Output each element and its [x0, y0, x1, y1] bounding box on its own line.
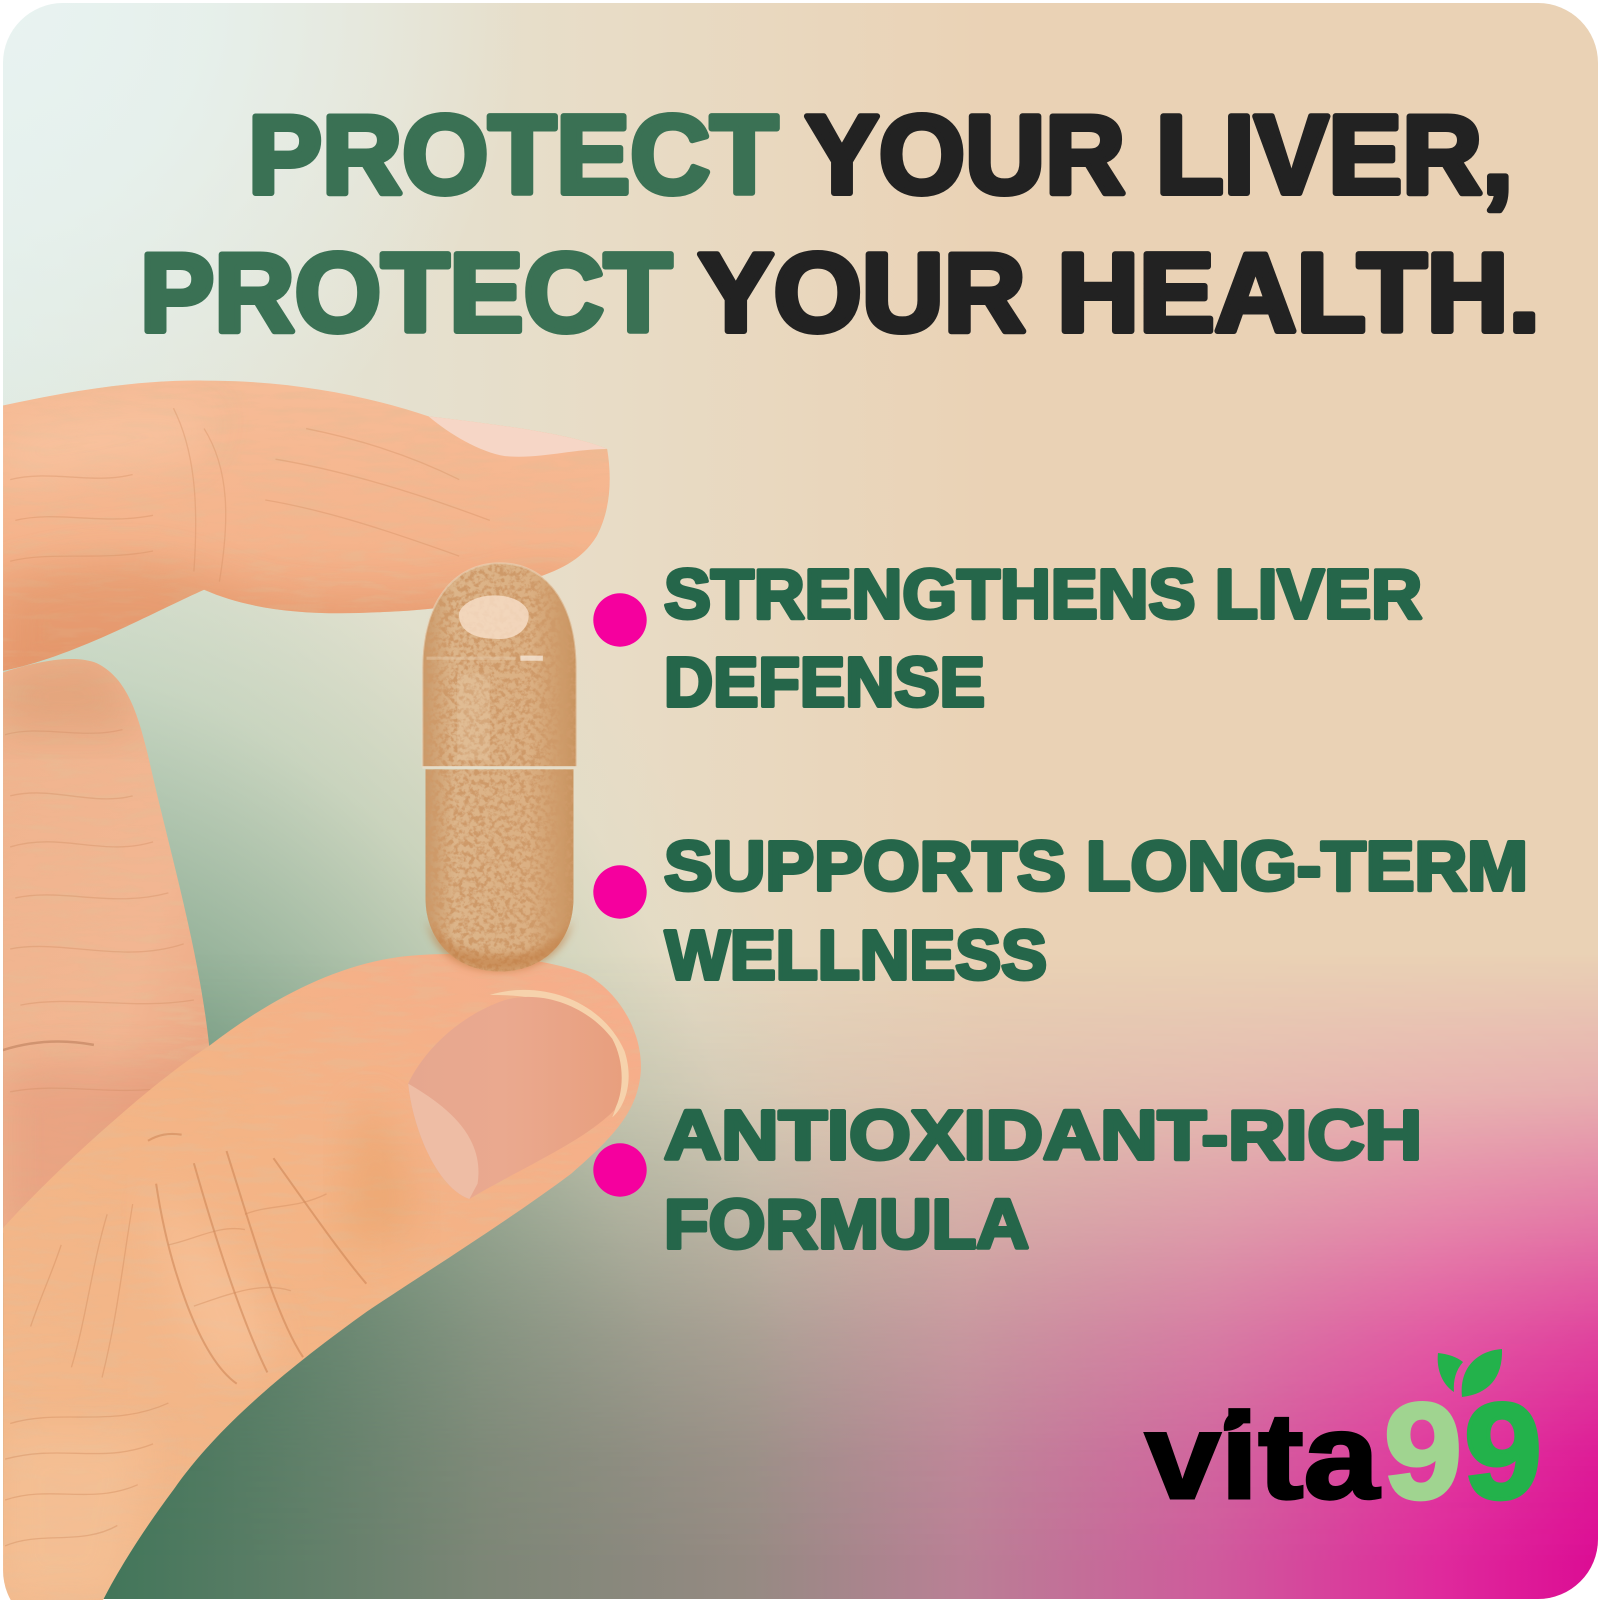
headline	[140, 93, 1540, 355]
bullet text 2: WELLNESS	[665, 916, 1047, 994]
logo: vita99	[1145, 1349, 1542, 1527]
capsule	[422, 563, 577, 971]
logo: vita99: 9	[1384, 1375, 1462, 1527]
bullet text 2: SUPPORTS LONG-TERM	[664, 827, 1528, 905]
logo leaf on i	[1224, 1409, 1248, 1431]
index finger nail	[429, 416, 607, 457]
headline line 1: PROTECT	[248, 93, 778, 217]
headline line 2: YOUR HEALTH.	[698, 231, 1540, 355]
headline line 2	[140, 231, 1540, 355]
logo: vita99: vita	[1145, 1388, 1380, 1524]
bullet 3	[593, 1096, 1422, 1263]
bullet dot 3	[593, 1143, 647, 1197]
bullet text 3: ANTIOXIDANT-RICH	[664, 1096, 1422, 1174]
headline line 1	[248, 93, 1513, 217]
thumb	[0, 949, 653, 1600]
hand holding capsule	[0, 378, 653, 1600]
headline line 1: YOUR LIVER,	[805, 93, 1513, 217]
bullet text 1: STRENGTHENS LIVER	[664, 555, 1422, 633]
bullet 1	[593, 555, 1422, 721]
thumb nail	[408, 990, 629, 1199]
headline line 2: PROTECT	[140, 231, 672, 355]
bullet 2	[593, 827, 1528, 994]
logo leaves	[1438, 1349, 1502, 1397]
bullet text 3: FORMULA	[664, 1185, 1029, 1263]
bullet text 1: DEFENSE	[664, 643, 985, 721]
index finger	[0, 378, 612, 694]
bullet dot 2	[593, 865, 647, 919]
bullet dot 1	[593, 593, 647, 647]
middle finger	[0, 653, 214, 1255]
logo: vita99: 9	[1464, 1375, 1542, 1527]
